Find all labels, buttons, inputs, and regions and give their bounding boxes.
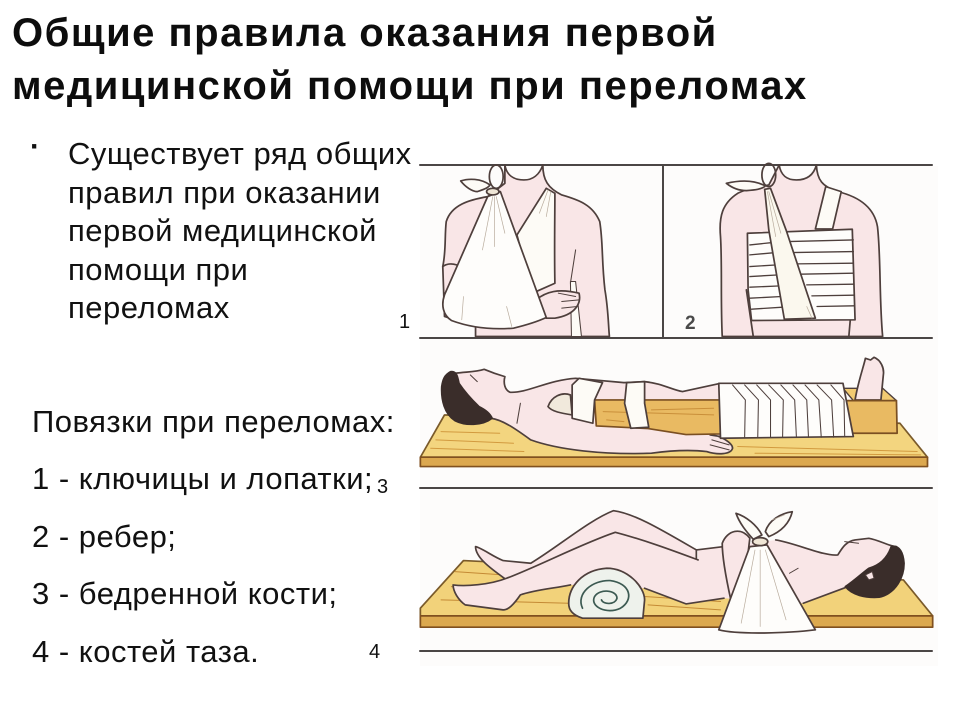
panel 2: rib bandage	[720, 163, 883, 336]
text block: list of bandages: 4 - костей таза.	[32, 634, 259, 668]
label: figure number 1: 1	[399, 311, 410, 333]
text block: list of bandages: 1 - ключицы и лопатки;	[32, 461, 373, 496]
label: figure number 2: 2	[685, 313, 696, 334]
text block: introduction: первой медицинской	[68, 213, 377, 248]
text block: introduction: Существует ряд общих	[68, 136, 412, 171]
title: медицинской помощи при переломах	[12, 64, 808, 108]
text block: list of bandages	[32, 404, 395, 668]
text block: introduction: правил при оказании	[68, 174, 381, 210]
bullet marker: ·	[30, 130, 40, 163]
panel 1: arm sling for collarbone	[443, 165, 609, 336]
text block: introduction	[68, 136, 412, 325]
title: Общие правила оказания первой	[12, 11, 718, 55]
panel 3: femur splint on a board	[420, 357, 928, 467]
title	[12, 11, 808, 108]
text block: list of bandages: Повязки при переломах:	[32, 404, 395, 438]
text block: list of bandages: 3 - бедренной кости;	[32, 576, 338, 611]
label: figure number 3: 3	[377, 476, 388, 498]
panel 4: pelvic fracture position on a board	[420, 511, 933, 633]
text block: introduction: помощи при	[68, 252, 248, 286]
text block: list of bandages: 2 - ребер;	[32, 518, 176, 554]
text block: introduction: переломах	[68, 290, 230, 325]
label: figure number 4: 4	[369, 641, 380, 663]
